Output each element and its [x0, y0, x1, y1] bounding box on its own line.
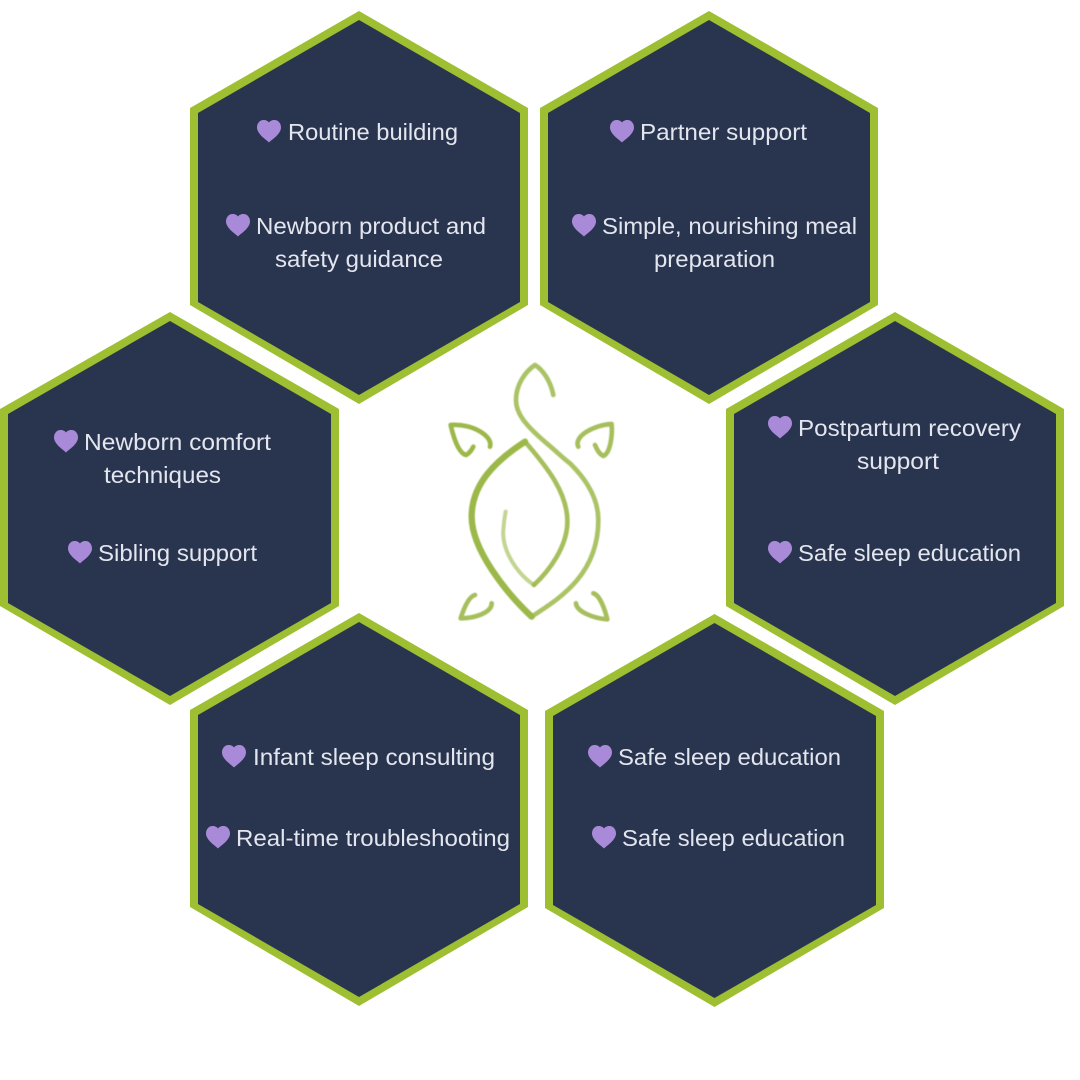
panel: routine and product guidance	[190, 11, 528, 404]
panel: infant sleep and troubleshooting	[190, 613, 528, 1006]
panel: postpartum recovery and safe sleep: Postpartum recovery	[798, 415, 1022, 441]
panel: postpartum recovery and safe sleep	[726, 312, 1064, 705]
panel: postpartum recovery and safe sleep: support	[857, 448, 940, 474]
panel: comfort and sibling support: Sibling support	[98, 540, 258, 566]
panel: safe sleep education: Safe sleep education	[618, 744, 841, 770]
panel: partner support and meals: preparation	[654, 246, 775, 272]
panel: safe sleep education: Safe sleep education	[622, 825, 845, 851]
panel: postpartum recovery and safe sleep: Safe sleep education	[798, 540, 1021, 566]
panel: partner support and meals	[540, 11, 878, 404]
panel: comfort and sibling support: Newborn comfort	[84, 429, 272, 455]
panel: routine and product guidance: Routine building	[288, 119, 458, 145]
panel: partner support and meals: Simple, nourishing meal	[602, 213, 857, 239]
icon: turtle logo	[451, 365, 612, 619]
panel: routine and product guidance: safety guidance	[275, 246, 443, 272]
panel: infant sleep and troubleshooting: Infant sleep consulting	[253, 744, 495, 770]
panel: safe sleep education	[545, 614, 884, 1007]
panel: comfort and sibling support: techniques	[104, 462, 221, 488]
panel: comfort and sibling support	[0, 312, 339, 705]
panel: routine and product guidance: Newborn product and	[256, 213, 486, 239]
panel: infant sleep and troubleshooting: Real-time troubleshooting	[236, 825, 510, 851]
panel: partner support and meals: Partner support	[640, 119, 808, 145]
